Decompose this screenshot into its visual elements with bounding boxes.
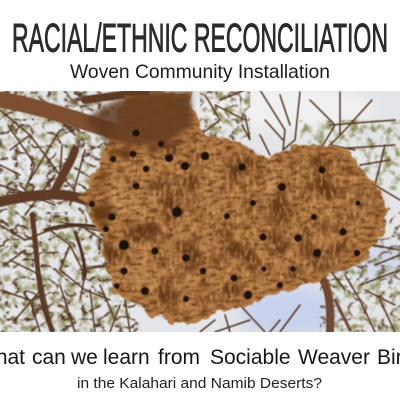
question heading: we	[70, 346, 98, 369]
foliage speckle left	[0, 91, 130, 332]
question heading: learn	[103, 346, 150, 369]
question heading: from	[158, 346, 200, 369]
subtitle: Woven Community Installation	[70, 61, 330, 83]
location caption: in the Kalahari and Namib Deserts?	[77, 376, 322, 392]
question heading: Sociable	[210, 346, 291, 369]
twig network left	[0, 91, 140, 332]
shaded nest top	[85, 92, 193, 145]
lit and shaded tufts	[104, 158, 380, 290]
sky	[0, 86, 400, 338]
question heading: Weaver	[298, 346, 370, 369]
thick tree limbs	[0, 92, 350, 334]
nest mass	[82, 92, 386, 322]
straw texture light	[110, 140, 380, 318]
photo: sociable weaver nest in tree	[0, 86, 400, 338]
thin branches	[0, 90, 400, 332]
twig network right	[200, 91, 400, 332]
low frequency tuft shading	[90, 138, 378, 316]
nest entrance holes	[89, 130, 360, 302]
question heading: can	[32, 346, 66, 369]
foliage speckle right	[200, 91, 400, 332]
straw texture dark	[82, 92, 386, 322]
